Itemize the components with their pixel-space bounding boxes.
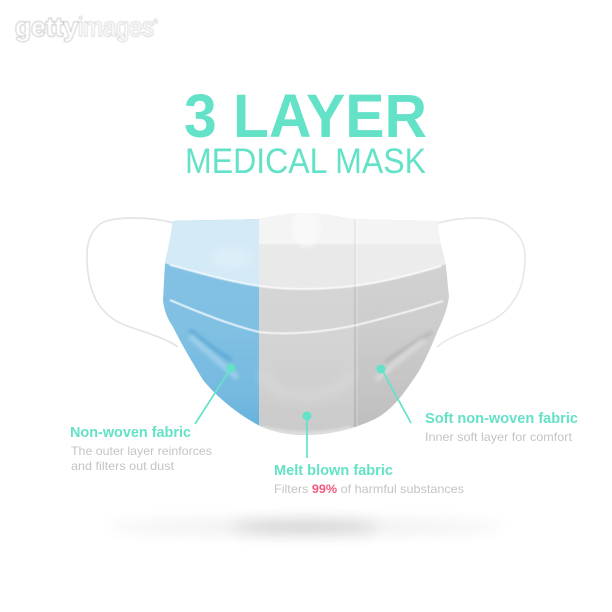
callout: pointers	[195, 364, 411, 458]
callout: soft non-woven fabric: Inner soft layer for comfort	[425, 430, 573, 444]
watermark logo	[15, 12, 159, 42]
callout: non-woven fabric: The outer layer reinforces	[71, 444, 212, 458]
callout: non-woven fabric: Non-woven fabric	[70, 424, 191, 441]
callout: non-woven fabric	[70, 424, 212, 473]
panel: inner grey layer	[354, 246, 449, 428]
callout: soft non-woven fabric	[425, 410, 578, 444]
icon: left ear loop	[87, 218, 178, 347]
fold line 2	[170, 300, 443, 333]
title	[184, 82, 427, 181]
callout: soft non-woven fabric: Soft non-woven fabric	[425, 410, 578, 427]
watermark logo: images	[78, 12, 154, 42]
callout: melt blown fabric	[274, 462, 464, 496]
lower pleat shading	[190, 330, 231, 360]
title: 3 LAYER	[184, 82, 427, 150]
watermark logo: getty	[15, 12, 78, 42]
panel: outer blue layer	[163, 219, 259, 426]
panel: middle white layer	[259, 286, 354, 435]
title: MEDICAL MASK	[185, 142, 426, 181]
callout: melt blown fabric: Filters 99% of harmful substances	[274, 482, 464, 496]
callout: melt blown fabric: Melt blown fabric	[274, 462, 393, 479]
top band above first fold	[165, 213, 446, 288]
fold line 1	[170, 265, 441, 289]
layer seam	[354, 215, 358, 440]
watermark logo: ®	[153, 18, 159, 26]
callout: non-woven fabric: and filters out dust	[71, 459, 175, 473]
ground shadow	[105, 521, 505, 533]
bottom lip	[262, 428, 352, 434]
mask body	[163, 213, 449, 435]
icon: right ear loop	[437, 218, 525, 347]
